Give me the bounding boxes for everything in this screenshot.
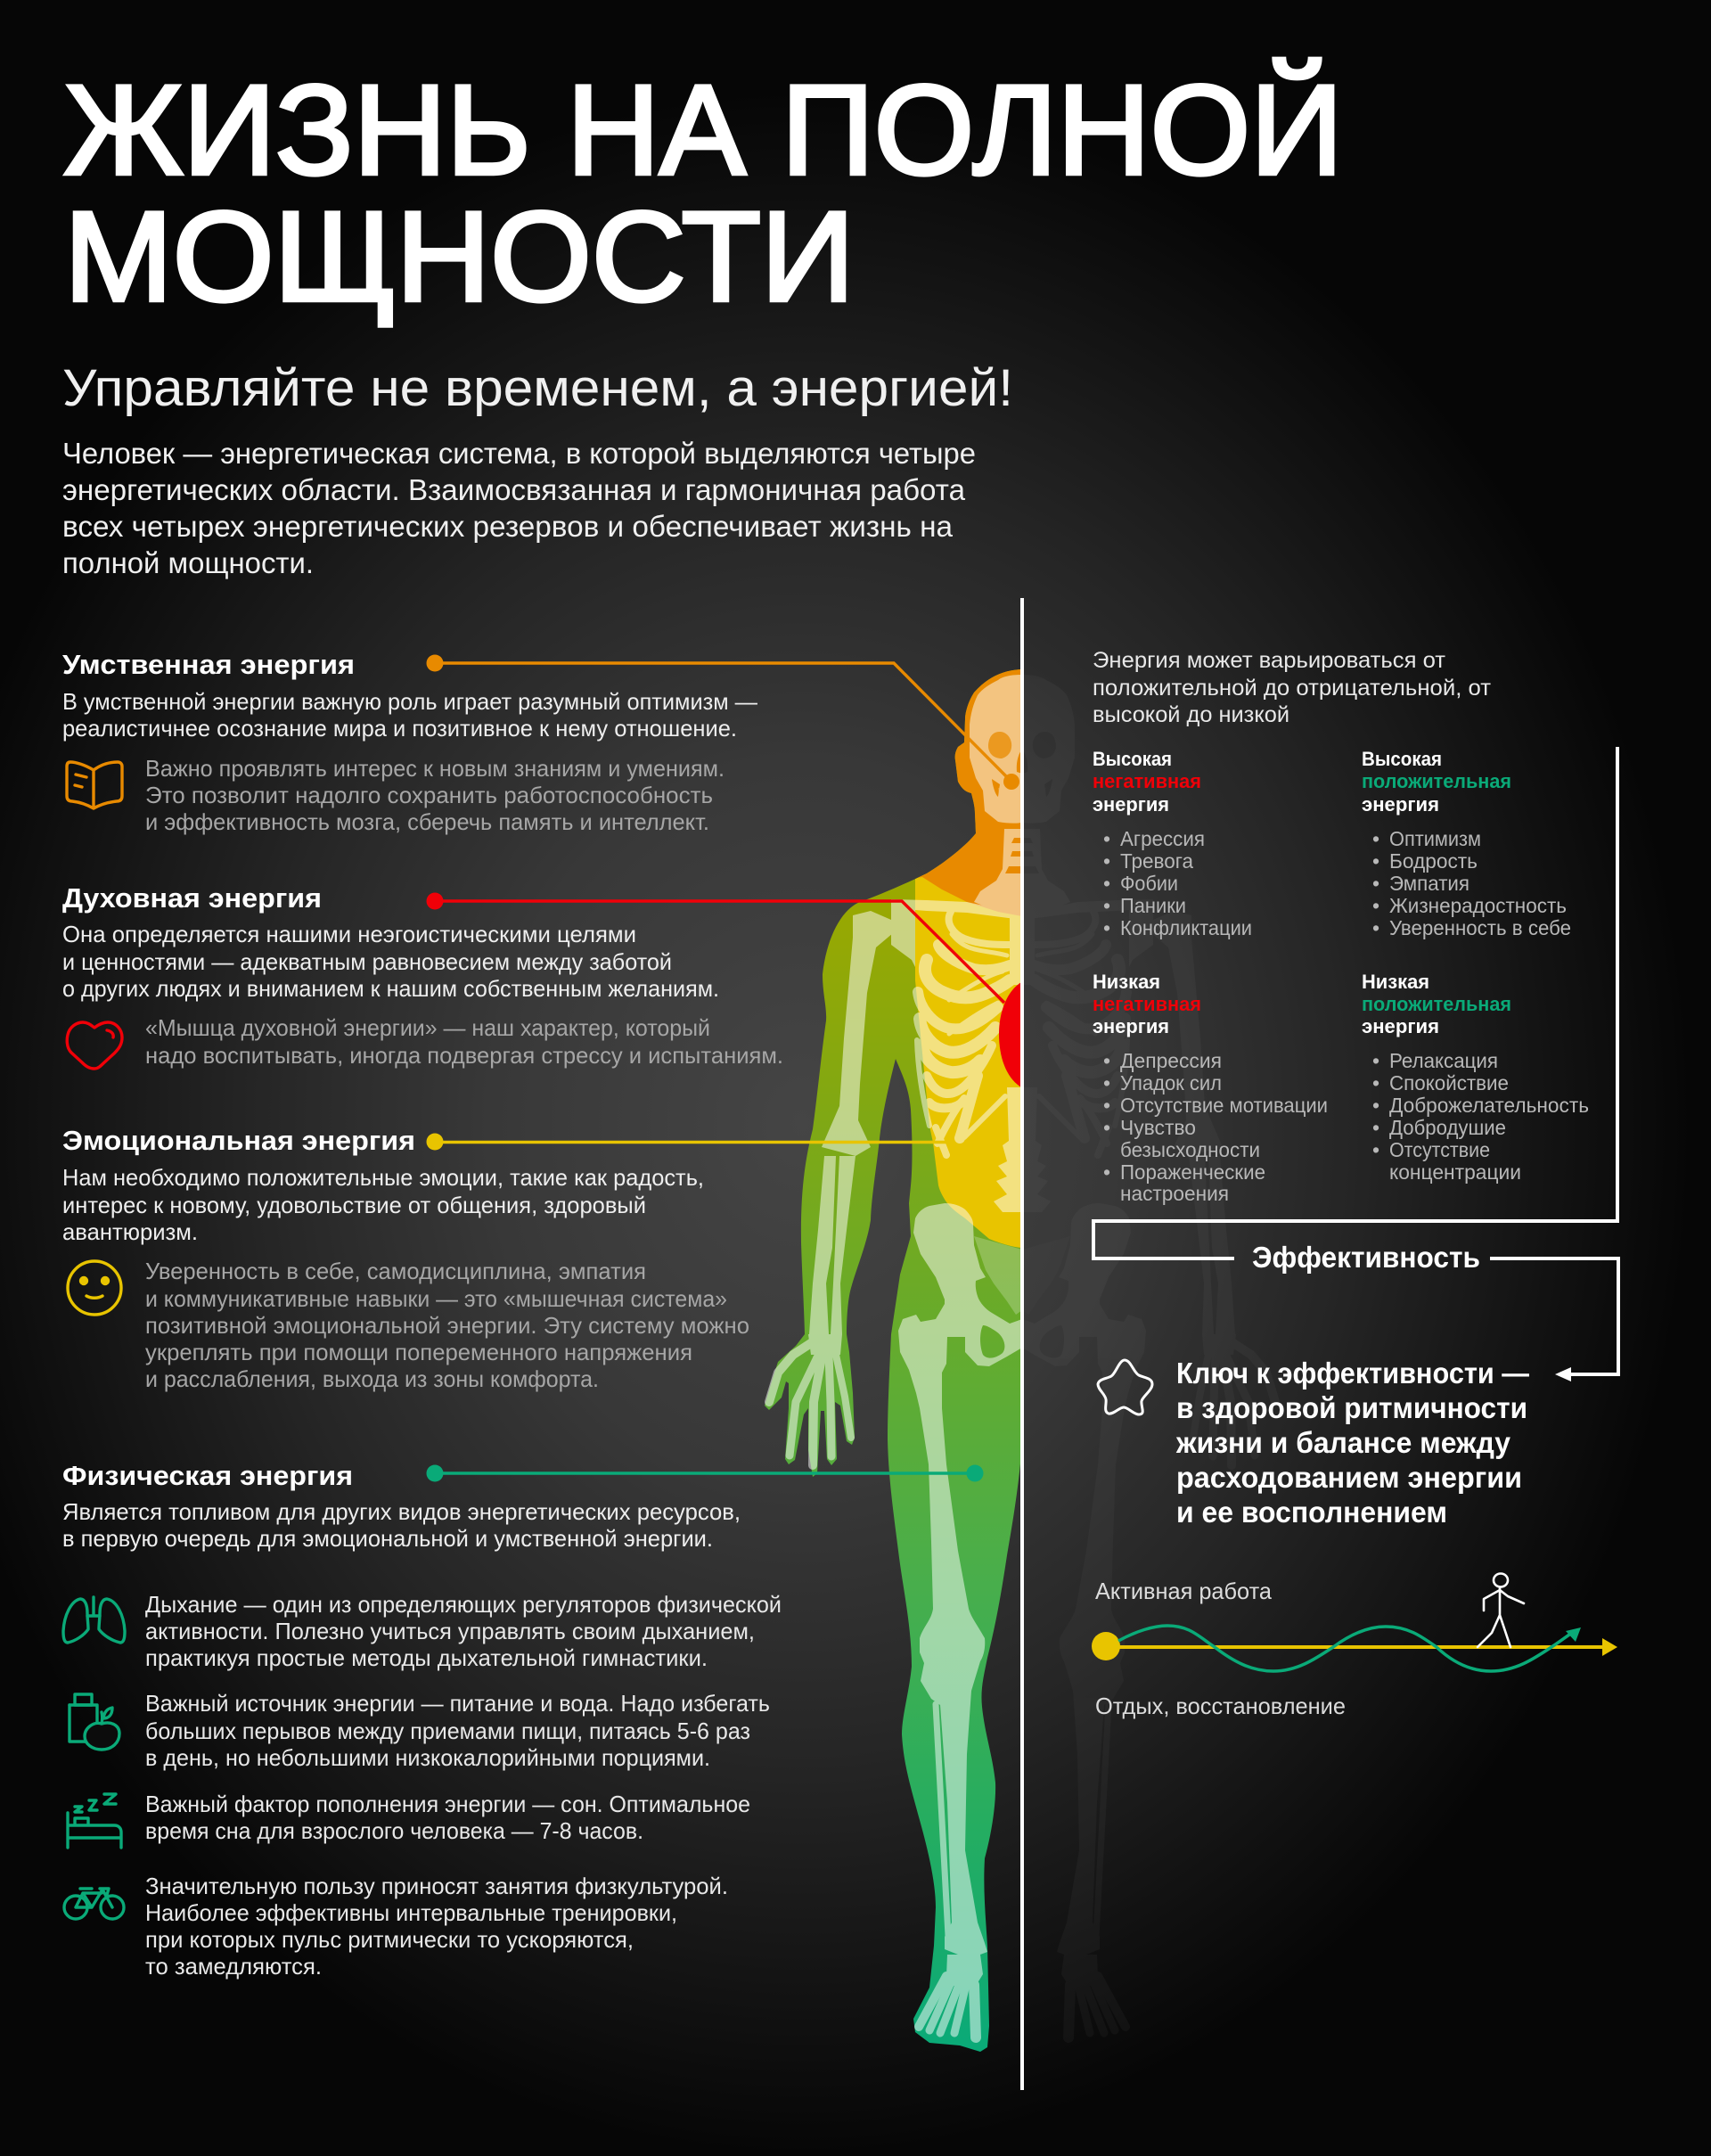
heading: high positive: Высокая (1362, 748, 1442, 770)
callout: key to effectiveness: жизни и балансе между (1175, 1427, 1510, 1460)
list: low negative: Чувство (1120, 1116, 1196, 1139)
emotional energy yellow zone (915, 865, 1022, 1248)
list: low negative: • (1103, 1094, 1110, 1117)
icon: bed and sleep (68, 1794, 121, 1848)
text: spiritual energy description (62, 921, 719, 1002)
list: low positive: • (1372, 1094, 1379, 1117)
heading: spiritual energy: Духовная энергия (62, 882, 322, 914)
connector: emotional energy (426, 1134, 949, 1150)
title: ЖИЗНЬ НА ПОЛНОЙ (64, 58, 1343, 201)
connector: physical energy (426, 1465, 984, 1481)
list: low negative: Упадок сил (1120, 1071, 1222, 1094)
text: breathing (145, 1591, 782, 1671)
list: high negative: • (1103, 872, 1110, 895)
list: low negative: безысходности (1120, 1138, 1260, 1161)
subtitle: Управляйте не временем, а энергией! (62, 359, 1013, 417)
list: high positive: Жизнерадостность (1389, 894, 1567, 917)
text: energy intro: высокой до низкой (1093, 702, 1289, 727)
list: high positive: Оптимизм (1389, 827, 1481, 850)
title (64, 58, 1343, 328)
text: energy intro (1093, 648, 1492, 727)
panel: low negative energy (1093, 971, 1328, 1205)
label: active work: Активная работа (1095, 1578, 1273, 1604)
list: low negative: • (1103, 1160, 1110, 1184)
list: low positive: концентрации (1389, 1160, 1521, 1184)
heading: mental energy: Умственная энергия (62, 649, 355, 680)
list: high positive: • (1372, 894, 1379, 917)
text: mental energy tip (145, 755, 725, 835)
text: mental energy description: В умственной энергии важную роль играет разумный оптимизм — (62, 688, 757, 715)
text: nutrition: Важный источник энергии — питание и вода. Надо избегать (145, 1690, 770, 1717)
text: sleep (145, 1791, 750, 1844)
body silhouette: physical energy green (765, 669, 1021, 2052)
text: energy intro: Энергия может варьироваться от (1093, 648, 1446, 673)
list: high positive: Эмпатия (1389, 872, 1469, 895)
text: breathing: практикуя простые методы дыхательной гимнастики. (145, 1644, 708, 1671)
intro paragraph: Человек — энергетическая система, в которой выделяются четыре (62, 437, 976, 470)
text: exercise: то замедляются. (145, 1953, 322, 1980)
list: high negative: Паники (1120, 894, 1186, 917)
human body figure (765, 660, 1022, 2052)
callout: key to effectiveness: в здоровой ритмичности (1176, 1392, 1527, 1425)
text: exercise: Значительную пользу приносят занятия физкультурой. (145, 1873, 728, 1899)
text: energy intro: положительной до отрицательной, от (1093, 676, 1492, 701)
text: mental energy tip: и эффективность мозга, сберечь память и интеллект. (145, 808, 709, 835)
text: mental energy tip: Это позволит надолго сохранить работоспособность (145, 782, 713, 808)
heading: low positive: Низкая (1362, 971, 1429, 993)
chart: work and rest rhythm (1092, 1574, 1617, 1671)
list: high positive (1372, 827, 1571, 939)
list: high positive: Бодрость (1389, 849, 1478, 873)
panel: low positive energy (1362, 971, 1589, 1184)
panel: high negative energy (1093, 748, 1252, 939)
spiritual energy red heart zone (999, 982, 1021, 1087)
heading: low positive (1362, 971, 1511, 1037)
list: low positive: Спокойствие (1389, 1071, 1509, 1094)
list: low positive (1372, 1049, 1589, 1184)
list: low negative: Отсутствие мотивации (1120, 1094, 1328, 1117)
callout: key to effectiveness (1175, 1357, 1529, 1529)
list: high negative: Конфликтации (1120, 916, 1252, 939)
panel: high positive energy (1362, 748, 1571, 939)
heading: low positive: энергия (1362, 1015, 1439, 1037)
icon: walking person (1478, 1574, 1524, 1647)
text: nutrition: больших перывов между приемами пищи, питаясь 5-6 раз (145, 1717, 750, 1744)
list: high negative: • (1103, 827, 1110, 850)
text: emotional energy description: авантюризм. (62, 1218, 198, 1245)
list: low positive: Отсутствие (1389, 1138, 1490, 1161)
heading: low negative: энергия (1093, 1015, 1169, 1037)
list: high negative: Агрессия (1120, 827, 1205, 850)
text: emotional energy description: Нам необходимо положительные эмоции, такие как радость, (62, 1164, 704, 1191)
label: rest and recovery: Отдых, восстановление (1095, 1693, 1346, 1719)
list: high positive: • (1372, 827, 1379, 850)
list: high negative: Фобии (1120, 872, 1178, 895)
icon: lungs (63, 1597, 125, 1643)
text: exercise: при которых пульс ритмически то ускоряются, (145, 1926, 634, 1953)
central divider (1020, 598, 1024, 2090)
list: low negative (1103, 1049, 1328, 1205)
text: breathing: активности. Полезно учиться управлять своим дыханием, (145, 1618, 755, 1644)
heading: effectiveness: Эффективность (1252, 1241, 1480, 1274)
text: nutrition: в день, но небольшими низкокалорийными порциями. (145, 1744, 710, 1771)
heading: high positive: энергия (1362, 793, 1439, 816)
text: mental energy description: реалистичнее осознание мира и позитивное к нему отношение. (62, 715, 737, 742)
heading: high positive (1362, 748, 1511, 816)
text: mental energy tip: Важно проявлять интерес к новым знаниям и умениям. (145, 755, 725, 782)
heading: high negative: негативная (1093, 770, 1201, 792)
list: high positive: • (1372, 916, 1379, 939)
text: spiritual energy tip: «Мышца духовной энергии» — наш характер, который (145, 1014, 710, 1041)
heading: low positive: положительная (1362, 993, 1511, 1015)
text: mental energy description (62, 688, 757, 742)
skeleton overlay (769, 675, 1022, 2037)
icon: star (1098, 1360, 1152, 1414)
list: high positive: Уверенность в себе (1389, 916, 1571, 939)
panel: spiritual energy (62, 882, 783, 1069)
mental energy orange zone (918, 669, 1020, 916)
intro paragraph (62, 437, 976, 579)
title: МОЩНОСТИ (64, 186, 855, 328)
heading: physical energy: Физическая энергия (62, 1460, 353, 1491)
list: low negative: • (1103, 1049, 1110, 1072)
icon: bottle and apple (70, 1694, 119, 1750)
text: nutrition (145, 1690, 770, 1771)
text: emotional energy description (62, 1164, 704, 1245)
list: low positive: • (1372, 1116, 1379, 1139)
list: low positive: • (1372, 1138, 1379, 1161)
callout: key to effectiveness: и ее восполнением (1176, 1496, 1447, 1529)
text: spiritual energy description: о других людях и вниманием к нашим собственным желаниям. (62, 975, 719, 1002)
right half ghost skeleton (1022, 675, 1275, 2037)
list: low positive: • (1372, 1071, 1379, 1094)
list: high negative: Тревога (1120, 849, 1193, 873)
text: emotional energy tip: Уверенность в себе, самодисциплина, эмпатия (145, 1258, 646, 1284)
heading: high positive: положительная (1362, 770, 1511, 792)
text: physical energy description: в первую очередь для эмоциональной и умственной энергии. (62, 1525, 713, 1552)
icon: bicycle (64, 1889, 124, 1919)
list: low positive: Доброжелательность (1389, 1094, 1589, 1117)
text: sleep: время сна для взрослого человека — 7-8 часов. (145, 1817, 643, 1844)
text: spiritual energy description: и ценностями — адекватным равновесием между заботой (62, 948, 672, 975)
text: emotional energy tip: позитивной эмоциональной энергии. Эту систему можно (145, 1312, 749, 1339)
heading: low negative: Низкая (1093, 971, 1160, 993)
heading: high negative: Высокая (1093, 748, 1172, 770)
list: low positive: Добродушие (1389, 1116, 1506, 1139)
connector: spiritual energy (426, 893, 1004, 1003)
arrow: effectiveness to key (1490, 1258, 1618, 1381)
list: low positive: • (1372, 1049, 1379, 1072)
text: emotional energy tip (145, 1258, 749, 1392)
callout: key to effectiveness: расходованием энергии (1176, 1462, 1522, 1495)
heading: low negative: негативная (1093, 993, 1201, 1015)
icon: open book (67, 762, 122, 808)
list: low negative: • (1103, 1116, 1110, 1139)
list: high negative: • (1103, 916, 1110, 939)
text: spiritual energy tip: надо воспитывать, иногда подвергая стрессу и испытаниям. (145, 1042, 783, 1069)
list: high positive: • (1372, 872, 1379, 895)
list: low negative: Пораженческие (1120, 1160, 1265, 1184)
text: emotional energy tip: и коммуникативные навыки — это «мышечная система» (145, 1285, 727, 1312)
list: high negative (1103, 827, 1252, 939)
text: exercise (145, 1873, 728, 1980)
intro paragraph: энергетических области. Взаимосвязанная и гармоничная работа (62, 473, 966, 506)
list: high negative: • (1103, 849, 1110, 873)
panel: mental energy (62, 649, 757, 835)
arrow: bracket into effectiveness (1093, 747, 1617, 1258)
connector: mental energy (426, 654, 1019, 790)
list: high positive: • (1372, 849, 1379, 873)
icon: smile (68, 1261, 121, 1315)
text: emotional energy tip: укреплять при помощи попеременного напряжения (145, 1339, 692, 1365)
heading: emotional energy: Эмоциональная энергия (62, 1125, 415, 1156)
intro paragraph: всех четырех энергетических резервов и обеспечивает жизнь на (62, 510, 954, 543)
list: high negative: • (1103, 894, 1110, 917)
text: emotional energy description: интерес к новому, удовольствие от общения, здоровый (62, 1192, 646, 1218)
list: low negative: настроения (1120, 1182, 1229, 1205)
icon: heart (67, 1022, 122, 1069)
heading: high negative (1093, 748, 1201, 816)
text: emotional energy tip: и расслабления, выхода из зоны комфорта. (145, 1365, 599, 1392)
text: spiritual energy tip (145, 1014, 783, 1069)
heading: low negative (1093, 971, 1201, 1037)
heading: high negative: энергия (1093, 793, 1169, 816)
text: breathing: Дыхание — один из определяющих регуляторов физической (145, 1591, 782, 1618)
intro paragraph: полной мощности. (62, 546, 314, 579)
list: low positive: Релаксация (1389, 1049, 1498, 1072)
text: physical energy description: Является топливом для других видов энергетических ресурсов, (62, 1498, 741, 1525)
callout: key to effectiveness: Ключ к эффективности — (1176, 1357, 1529, 1390)
text: sleep: Важный фактор пополнения энергии — сон. Оптимальное (145, 1791, 750, 1817)
text: spiritual energy description: Она определяется нашими неэгоистическими целями (62, 921, 636, 947)
text: exercise: Наиболее эффективны интервальные тренировки, (145, 1899, 677, 1926)
list: low negative: Депрессия (1120, 1049, 1222, 1072)
panel: physical energy (62, 1460, 782, 1980)
text: physical energy description (62, 1498, 741, 1552)
list: low negative: • (1103, 1071, 1110, 1094)
panel: emotional energy (62, 1125, 749, 1392)
